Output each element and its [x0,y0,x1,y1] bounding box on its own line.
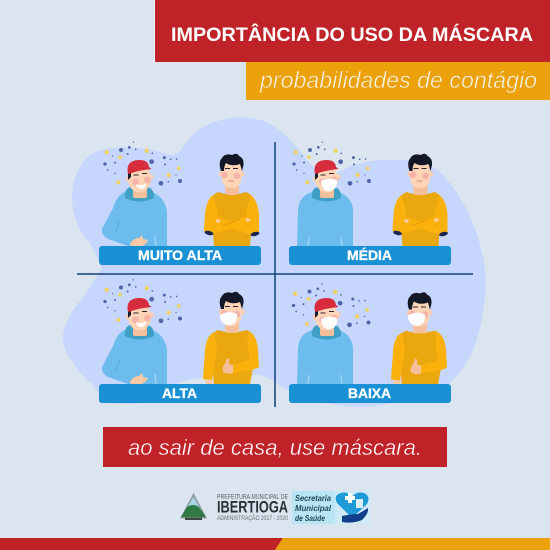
label [99,246,261,265]
label: MÉDIA [347,247,392,263]
person with mask [297,298,353,384]
logo: secretaria municipal de saúde [292,491,370,524]
background blob [63,118,486,407]
label [289,384,451,403]
panel: média [289,142,451,265]
logo: prefeitura wordmark: IBERTIOGA [217,498,288,516]
person with mask, thumb up [203,292,259,384]
label [99,384,261,403]
quadrant axis: vertical [274,142,276,407]
subtitle banner [246,62,550,100]
label: ALTA [162,385,197,401]
logo: prefeitura wordmark: PREFEITURA MUNICIPAL DE [217,494,288,501]
virus cloud [292,142,371,186]
virus cloud [103,142,182,186]
title: IMPORTÂNCIA DO USO DA MÁSCARA [171,22,533,46]
label [289,246,451,265]
subtitle: probabilidades de contágio [259,67,537,93]
person without mask, arms crossed [392,154,448,246]
logo: prefeitura wordmark: ADMINISTRAÇÃO 2017 - 2020 [217,513,288,522]
call to action banner: ao sair de casa, use máscara. [128,435,422,460]
person without mask [102,160,167,246]
label: MUITO ALTA [138,247,222,263]
footer bar: orange [275,538,550,550]
person with mask, thumb up [391,292,447,384]
panel: muito alta [99,142,261,265]
logo: secretaria municipal de saúde: de Saúde [295,514,325,523]
logo: secretaria municipal de saúde: Secretaria [295,494,332,503]
call to action banner [103,427,447,467]
icon: health heart and hand [335,491,370,524]
person with mask [297,160,353,246]
title banner [154,0,550,62]
person without mask [102,298,167,384]
person without mask, arms crossed [204,154,260,246]
footer bar: red [0,538,283,550]
logo: secretaria municipal de saúde: Municipal [295,504,332,513]
panel: baixa [289,283,451,403]
virus cloud [292,283,370,327]
logo: prefeitura wordmark [217,494,288,522]
label: BAIXA [348,385,391,401]
logo: city emblem [180,493,207,520]
quadrant axis: horizontal [77,273,473,275]
virus cloud [103,279,182,323]
panel: alta [99,279,261,403]
